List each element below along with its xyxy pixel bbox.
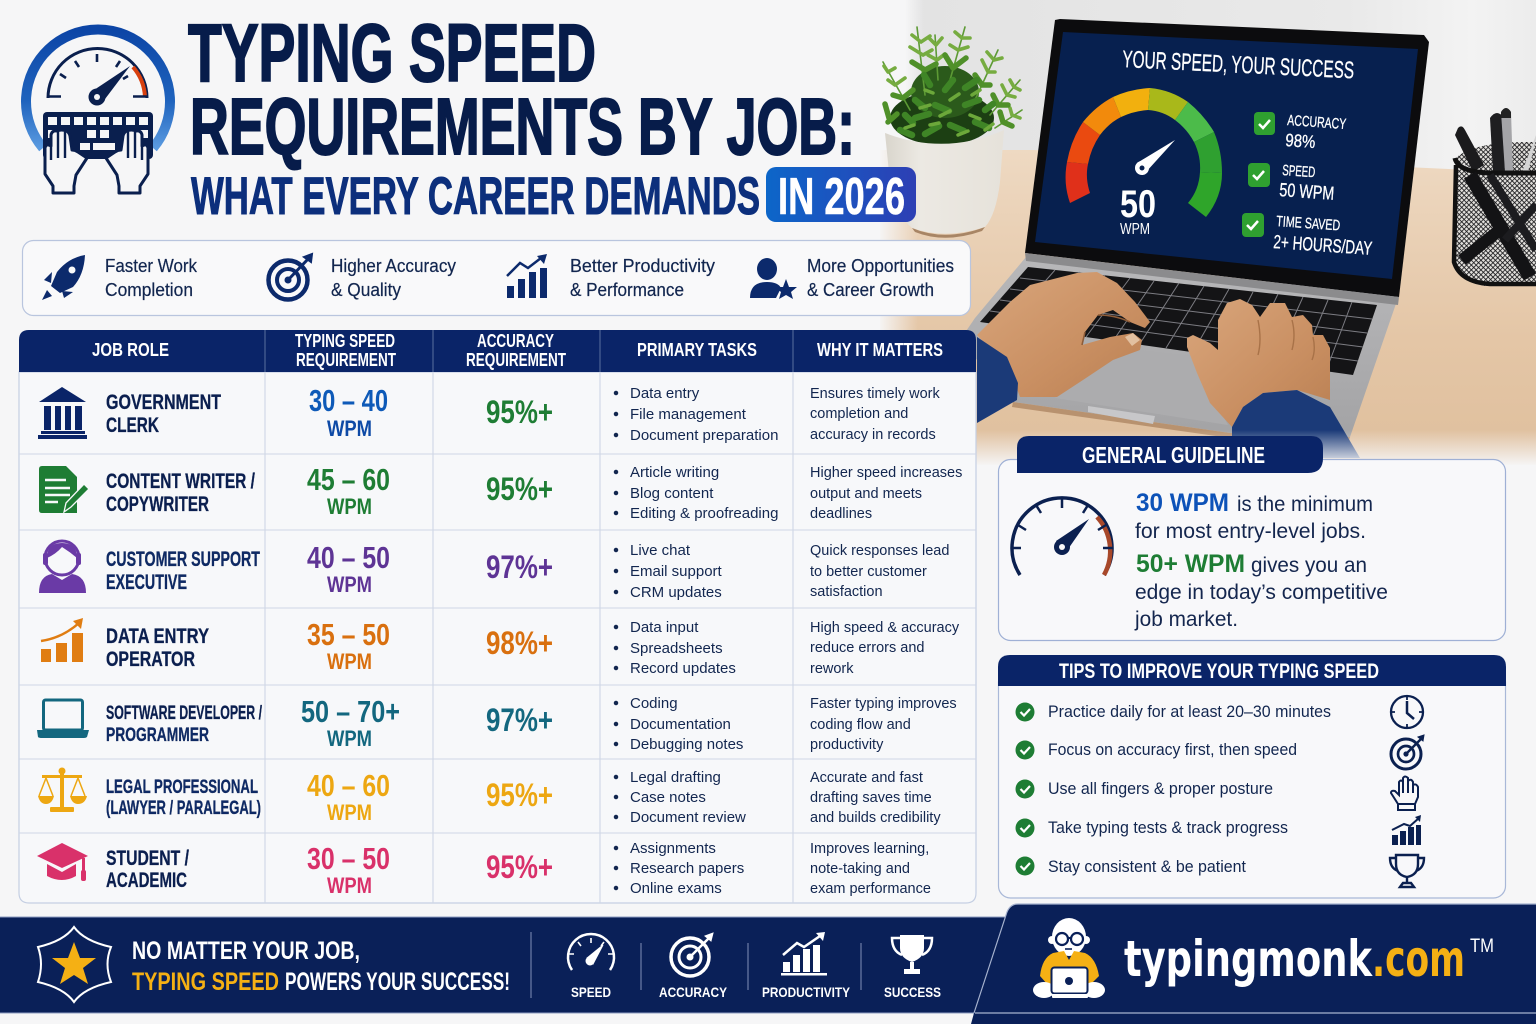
screen stats: [1242, 112, 1373, 260]
panel: tips: [998, 655, 1506, 898]
benefit text: more opportunities: More Opportunities: [807, 256, 954, 276]
icon: accuracy: ACCURACY: [659, 984, 728, 1000]
row: customer support: CRM updates: [630, 584, 722, 601]
guideline heading tab: [1017, 436, 1323, 473]
row: government clerk: [38, 383, 940, 444]
tip: accuracy: Focus on accuracy first, then speed: [1048, 741, 1297, 759]
screen stats: 2+ HOURS/DAY: [1273, 232, 1373, 260]
row: government clerk: accuracy in records: [810, 427, 936, 443]
guideline heading tab: GENERAL GUIDELINE: [1082, 442, 1265, 468]
row: content writer: Higher speed increases: [810, 465, 962, 481]
title: TYPING SPEED: [188, 8, 596, 99]
row: government clerk: Data entry: [630, 385, 700, 402]
icon: speed: SPEED: [571, 984, 611, 1000]
guideline text: is the minimum: [1237, 492, 1373, 516]
row: customer support: satisfaction: [810, 584, 883, 600]
row: data entry operator: Data input: [630, 619, 699, 636]
row: student: Online exams: [630, 880, 722, 897]
icon: support agent: [39, 541, 86, 593]
guideline text: [1134, 489, 1388, 631]
row: legal professional: drafting saves time: [810, 790, 932, 806]
table header: [19, 330, 976, 372]
screen stats: SPEED: [1282, 162, 1316, 181]
row: customer support: [39, 540, 949, 601]
footer band: [0, 917, 1010, 1013]
panel: typingmonk logo: [971, 904, 1536, 1024]
row: customer support: 40 – 50: [307, 540, 390, 575]
row: government clerk: Ensures timely work: [810, 386, 940, 402]
plant: [883, 27, 1022, 145]
guideline text: job market.: [1134, 607, 1238, 631]
row: legal professional: (LAWYER / PARALEGAL): [106, 798, 261, 819]
wordmark: TM: [1470, 936, 1494, 957]
icon: graduation cap: [37, 843, 88, 881]
benefit text: better productivity: Better Productivity: [570, 256, 715, 276]
row: legal professional: Accurate and fast: [810, 770, 923, 786]
photo: laptop on desk: [878, 0, 1536, 468]
row: student: ACADEMIC: [106, 869, 187, 892]
icon: success: SUCCESS: [884, 984, 941, 1000]
icon: rocket: [42, 255, 85, 300]
laptop screen: [1035, 32, 1418, 279]
row: software developer: PROGRAMMER: [106, 724, 209, 746]
row: data entry operator: WPM: [327, 649, 372, 674]
icon: person with star: [750, 258, 797, 299]
screen stats: TIME SAVED: [1276, 213, 1341, 234]
row: legal professional: and builds credibility: [810, 810, 941, 826]
guideline text: 30 WPM: [1136, 489, 1229, 517]
row: data entry operator: Spreadsheets: [630, 640, 723, 657]
row: government clerk: Document preparation: [630, 427, 778, 444]
row: content writer: COPYWRITER: [106, 493, 209, 516]
icon: success: [884, 935, 941, 1000]
row: government clerk: WPM: [327, 416, 372, 441]
screen gauge: WPM: [1120, 221, 1150, 238]
footer slogan: TYPING SPEED: [132, 968, 279, 996]
benefit text: more opportunities: & Career Growth: [807, 280, 934, 300]
row: data entry operator: High speed & accuracy: [810, 620, 960, 636]
benefit text: better productivity: [570, 256, 715, 300]
row: content writer: CONTENT WRITER /: [106, 470, 255, 493]
row: government clerk: 95%+: [486, 394, 553, 430]
right hand: [1187, 299, 1330, 427]
table header: REQUIREMENT: [466, 350, 566, 370]
table header: PRIMARY TASKS: [637, 340, 757, 360]
title: REQUIREMENTS BY JOB:: [190, 82, 855, 171]
screen stats: 98%: [1285, 130, 1316, 152]
tip: practice daily: [1016, 696, 1423, 728]
row: legal professional: WPM: [327, 800, 372, 825]
row: software developer: Coding: [630, 695, 678, 712]
icon: guideline gauge: [1011, 498, 1113, 575]
row: legal professional: Case notes: [630, 789, 706, 806]
row: software developer: Debugging notes: [630, 736, 743, 753]
row: customer support: CUSTOMER SUPPORT: [106, 548, 260, 571]
icon: speed: [568, 934, 614, 1000]
row: content writer: Article writing: [630, 464, 719, 481]
benefit text: faster work: Faster Work: [105, 256, 198, 276]
speed value: 50: [1120, 183, 1156, 226]
icon: accuracy: [659, 933, 728, 1000]
tip: consistent: Stay consistent & be patient: [1048, 858, 1246, 876]
keyboard: [980, 267, 1377, 375]
row: student: Improves learning,: [810, 841, 929, 857]
icon: productivity: PRODUCTIVITY: [762, 984, 851, 1000]
row: software developer: Documentation: [630, 716, 731, 733]
panel: general guideline: [998, 436, 1506, 640]
row: content writer: 45 – 60: [307, 462, 390, 497]
row: customer support: WPM: [327, 572, 372, 597]
footer slogan: [132, 937, 510, 996]
footer slogan: NO MATTER YOUR JOB,: [132, 937, 360, 965]
row: data entry operator: reduce errors and: [810, 640, 924, 656]
row: software developer: coding flow and: [810, 717, 911, 733]
row: student: STUDENT /: [106, 847, 189, 870]
icon: target: [268, 254, 312, 300]
pencil holder: [1454, 108, 1536, 286]
row: data entry operator: DATA ENTRY: [106, 625, 209, 648]
row: student: note-taking and: [810, 861, 910, 877]
icon: document and pencil: [39, 466, 89, 513]
row: data entry operator: 35 – 50: [307, 617, 390, 652]
row: data entry operator: 98%+: [486, 625, 553, 661]
left hand: [977, 272, 1150, 397]
row: software developer: SOFTWARE DEVELOPER /: [106, 703, 262, 724]
row: legal professional: Legal drafting: [630, 769, 721, 786]
row: student: [37, 840, 931, 898]
benefit text: more opportunities: [807, 256, 954, 300]
row: customer support: to better customer: [810, 564, 927, 580]
screen stats: ACCURACY: [1287, 112, 1347, 133]
guideline text: gives you an: [1251, 553, 1367, 577]
row: content writer: WPM: [327, 494, 372, 519]
screen stats: 50 WPM: [1279, 180, 1335, 205]
benefit text: faster work: [105, 256, 198, 300]
benefit text: higher accuracy: & Quality: [331, 280, 401, 300]
tip: consistent: [1016, 855, 1424, 887]
icon: scales of justice: [38, 768, 87, 812]
row: software developer: [37, 694, 957, 753]
guideline text: edge in today’s competitive: [1135, 580, 1388, 604]
screen heading: YOUR SPEED, YOUR SUCCESS: [1122, 46, 1355, 84]
row: data entry operator: [41, 617, 960, 677]
row: student: 30 – 50: [307, 841, 390, 876]
icon: bar chart: [507, 254, 547, 298]
row: legal professional: 40 – 60: [307, 768, 390, 803]
row: content writer: [39, 462, 962, 522]
footer slogan: POWERS YOUR SUCCESS!: [285, 968, 510, 996]
row: software developer: productivity: [810, 737, 884, 753]
icon: productivity: [762, 932, 851, 1000]
row: content writer: Blog content: [630, 485, 714, 502]
benefit text: higher accuracy: Higher Accuracy: [331, 256, 456, 276]
row: legal professional: Document review: [630, 809, 746, 826]
row: customer support: 97%+: [486, 549, 553, 585]
row: legal professional: LEGAL PROFESSIONAL: [106, 777, 258, 798]
screen gauge: [1066, 88, 1222, 238]
logo icon: speedometer, keyboard and hands: [26, 30, 170, 193]
table header: TYPING SPEED: [295, 331, 395, 351]
table header: ACCURACY: [477, 331, 554, 351]
right sleeve: [1232, 390, 1360, 458]
wordmark: typingmonk: [1124, 930, 1373, 988]
row: legal professional: 95%+: [486, 777, 553, 813]
guideline text: for most entry-level jobs.: [1135, 519, 1366, 543]
row: software developer: 50 – 70+: [301, 694, 400, 729]
row: data entry operator: OPERATOR: [106, 648, 195, 671]
row: customer support: Email support: [630, 563, 723, 580]
row: student: WPM: [327, 873, 372, 898]
row: government clerk: 30 – 40: [309, 383, 388, 418]
table header: WHY IT MATTERS: [817, 340, 943, 360]
title: [188, 8, 916, 226]
tip: fingers and posture: Use all fingers & proper posture: [1048, 780, 1273, 798]
row: data entry operator: rework: [810, 661, 854, 677]
tip: fingers and posture: [1016, 776, 1418, 810]
tip: tests: Take typing tests & track progress: [1048, 819, 1288, 837]
guideline text: 50+ WPM: [1136, 550, 1245, 578]
row: customer support: Quick responses lead: [810, 543, 949, 559]
panel: benefits strip: [22, 240, 970, 316]
row: legal professional: [38, 768, 941, 826]
row: student: Research papers: [630, 860, 744, 877]
table header: REQUIREMENT: [296, 350, 396, 370]
row: software developer: WPM: [327, 726, 372, 751]
row: data entry operator: Record updates: [630, 660, 736, 677]
wordmark: .com: [1372, 930, 1465, 988]
tip: practice daily: Practice daily for at least 20–30 minutes: [1048, 703, 1331, 721]
benefit text: better productivity: & Performance: [570, 280, 684, 300]
table: typing speed by job: [19, 330, 976, 903]
row: software developer: Faster typing improves: [810, 696, 957, 712]
benefit text: faster work: Completion: [105, 280, 193, 300]
row: government clerk: completion and: [810, 406, 908, 422]
left sleeve: [977, 337, 1018, 423]
icon: star badge: [38, 927, 111, 1002]
year badge: IN 2026: [778, 168, 905, 226]
icon: laptop: [37, 700, 89, 738]
row: customer support: Live chat: [630, 542, 691, 559]
tips heading: [998, 655, 1506, 686]
table header: JOB ROLE: [92, 340, 169, 360]
row: content writer: deadlines: [810, 506, 872, 522]
benefit text: higher accuracy: [331, 256, 456, 300]
icon: government building: [38, 387, 87, 439]
row: student: 95%+: [486, 849, 553, 885]
tip: accuracy: [1016, 735, 1424, 769]
row: government clerk: CLERK: [106, 414, 159, 437]
icon: growth chart: [41, 618, 83, 662]
row: student: Assignments: [630, 840, 716, 857]
row: government clerk: File management: [630, 406, 747, 423]
row: content writer: Editing & proofreading: [630, 505, 778, 522]
tips heading: TIPS TO IMPROVE YOUR TYPING SPEED: [1059, 660, 1379, 683]
laptop base: [960, 257, 1399, 437]
row: content writer: 95%+: [486, 471, 553, 507]
tip: tests: [1016, 815, 1421, 845]
subtitle: WHAT EVERY CAREER DEMANDS: [191, 167, 760, 226]
row: government clerk: GOVERNMENT: [106, 391, 221, 414]
laptop lid: [1025, 19, 1429, 297]
row: content writer: output and meets: [810, 486, 922, 502]
row: software developer: 97%+: [486, 702, 553, 738]
row: student: exam performance: [810, 881, 931, 897]
plant pot: [885, 130, 1004, 234]
row: customer support: EXECUTIVE: [106, 571, 187, 594]
icon: monk with laptop: [1033, 918, 1105, 998]
